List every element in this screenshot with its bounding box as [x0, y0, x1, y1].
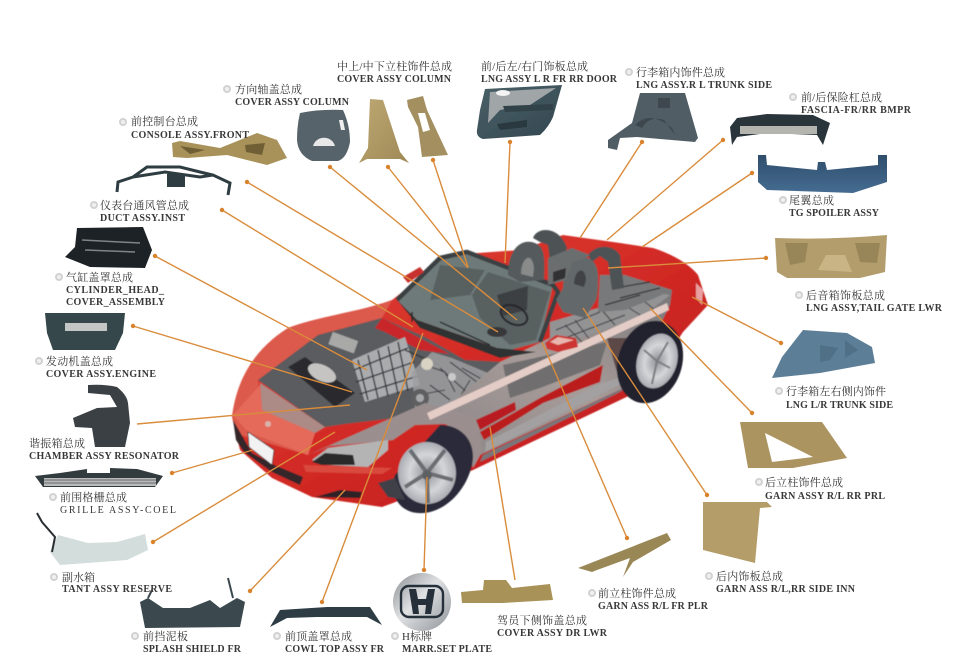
label: resonator [29, 436, 180, 462]
label: resonator: CHAMBER ASSY RESONATOR [29, 451, 180, 462]
car body [232, 235, 708, 507]
label: driver lower cover [497, 613, 608, 639]
black engine cover [288, 357, 355, 407]
label: splash shield: SPLASH SHIELD FR [143, 644, 242, 655]
label: driver lower cover: COVER ASSY DR LWR [497, 628, 608, 639]
engine bay [258, 318, 503, 427]
label: bumper fascia: FASCIA-FR/RR BMPR [801, 105, 912, 116]
label: instrument duct: DUCT ASSY.INST [100, 213, 185, 224]
label: steering column cover: COVER ASSY COLUMN [235, 97, 350, 108]
console dark [487, 327, 507, 337]
hood highlight band [232, 300, 392, 455]
sill [480, 385, 630, 462]
part: spoiler [758, 155, 887, 193]
car cutaway illustration [232, 230, 708, 513]
air vent [315, 490, 362, 498]
radiator window [260, 383, 325, 433]
label: console [120, 114, 249, 141]
wiper [412, 312, 490, 345]
part: grille [35, 468, 163, 487]
label: bumper fascia [790, 90, 912, 116]
label: cylinder head cover: 气缸盖罩总成 [66, 270, 133, 284]
label: tail gate trim: LNG ASSY,TAIL GATE LWR [806, 303, 943, 314]
label: instrument duct: 仪表台通风管总成 [100, 198, 189, 212]
part: rear inner panel [703, 502, 772, 563]
seat hoop openings [521, 258, 534, 277]
label: rear pillar trim [756, 475, 885, 502]
part: column trims [359, 96, 448, 163]
rear deck mechanism [598, 275, 672, 312]
label: trunk side trim [626, 65, 772, 91]
part: splash shield [140, 578, 245, 628]
part: rear pillar trim [740, 422, 847, 468]
label: H badge [392, 629, 492, 655]
label: driver lower cover: 驾员下侧饰盖总成 [497, 613, 587, 627]
part: console [172, 133, 287, 165]
label: console: 前控制台总成 [131, 114, 198, 128]
label: grille [50, 490, 176, 516]
label: engine cover [36, 354, 156, 380]
windshield [397, 252, 553, 350]
label: reserve tank: 副水箱 [62, 570, 95, 584]
part: tail gate trim [775, 235, 887, 278]
part: H badge [393, 573, 451, 631]
label: instrument duct [91, 198, 189, 224]
label: spoiler: 尾翼总成 [789, 193, 834, 207]
label: rear inner panel: GARN ASS R/L,RR SIDE INN [716, 584, 856, 595]
front wheel [378, 425, 473, 513]
label: front pillar trim: GARN ASS R/L FR PLR [598, 601, 709, 612]
upper mechanism [550, 292, 670, 348]
label: trunk side trim: LNG ASSY.R L TRUNK SIDE [636, 80, 772, 91]
label: grille: 前围格栅总成 [60, 490, 127, 504]
part: door panel [477, 85, 562, 139]
label: rear inner panel [706, 569, 856, 595]
label: reserve tank: TANT ASSY RESERVE [62, 584, 172, 595]
label: splash shield [132, 629, 242, 655]
label: spoiler [780, 193, 880, 219]
label: column trims: COVER ASSY COLUMN [337, 74, 452, 85]
steering wheel [498, 301, 530, 329]
label: cylinder head cover: CYLINDER_HEAD_ [66, 285, 165, 296]
label: H badge: MARR.SET PLATE [402, 644, 492, 655]
right engine parts [412, 352, 500, 412]
engine block [352, 337, 420, 402]
nose panel [233, 385, 315, 455]
dash shade [430, 265, 485, 300]
label: resonator: 谐振箱总成 [29, 436, 85, 450]
label: H badge: H标牌 [402, 629, 432, 643]
part: cylinder head cover [65, 227, 152, 268]
headlight [312, 440, 388, 467]
label: cylinder head cover: COVER_ASSEMBLY [66, 297, 166, 308]
label: tail gate trim [796, 288, 943, 314]
darker cockpit side [503, 342, 607, 398]
lower front grille [233, 420, 303, 485]
part: reserve tank [37, 513, 148, 565]
windscreen frame [397, 252, 558, 342]
part: bumper fascia [730, 114, 830, 145]
pale band [427, 303, 669, 420]
driver seat in cabin [497, 286, 528, 316]
label: trunk side panel: 行李箱左右侧内饰件 [786, 384, 886, 398]
seat hoops [533, 230, 567, 265]
part: trunk side trim [608, 93, 698, 150]
label: steering column cover: 方向轴盖总成 [235, 82, 302, 96]
label: grille: GRILLE ASSY-COEL [60, 505, 176, 516]
intake [305, 359, 339, 387]
label: door panel: 前/后左/右门饰板总成 [481, 59, 588, 73]
label: tail gate trim: 后音箱饰板总成 [806, 288, 885, 302]
cabin interior [472, 272, 550, 345]
label: rear pillar trim: 后立柱饰件总成 [765, 475, 843, 489]
label: column trims [337, 59, 452, 85]
label: rear pillar trim: GARN ASSY R/L RR PRL [765, 491, 885, 502]
firewall red zone [375, 318, 450, 354]
license plate [248, 432, 274, 465]
label: engine cover: COVER ASSY.ENGINE [46, 369, 156, 380]
red door front strip [476, 402, 516, 430]
label: front pillar trim [589, 586, 709, 612]
battery [328, 332, 358, 353]
label: trunk side trim: 行李箱内饰件总成 [636, 65, 725, 79]
red floor pan [480, 365, 603, 440]
part: front pillar trim [578, 533, 671, 577]
label: cowl top: 前顶盖罩总成 [285, 629, 352, 643]
part: trunk side panel [772, 330, 875, 378]
leader lines [111, 138, 783, 604]
lower bumper lip [303, 465, 392, 474]
label: rear inner panel: 后内饰板总成 [716, 569, 783, 583]
label: console: CONSOLE ASSY.FRONT [131, 130, 249, 141]
cowl bar [397, 300, 536, 358]
mirrors [545, 335, 578, 352]
label: trunk side panel: LNG L/R TRUNK SIDE [786, 400, 893, 411]
label: cylinder head cover [56, 270, 166, 308]
part: driver lower cover [461, 580, 553, 603]
label: splash shield: 前挡泥板 [143, 629, 188, 643]
label: bumper fascia: 前/后保险杠总成 [801, 90, 882, 104]
label: engine cover: 发动机盖总成 [46, 354, 113, 368]
label: steering column cover [224, 82, 350, 108]
seat backs behind [548, 248, 590, 285]
rear wheel [607, 312, 693, 412]
label: cowl top [274, 629, 385, 655]
part: cowl top [270, 607, 382, 627]
label: trunk side panel [776, 384, 893, 411]
label: spoiler: TG SPOILER ASSY [789, 208, 880, 219]
hood emblem [265, 421, 271, 427]
label: reserve tank [51, 570, 172, 595]
part: instrument duct [117, 167, 230, 195]
part: engine cover [45, 313, 125, 350]
front fender translucent [308, 403, 482, 468]
part: steering column cover [297, 110, 350, 161]
translucent door side [440, 290, 672, 455]
part: resonator [73, 385, 130, 447]
label: door panel [481, 59, 618, 85]
rear suspension [607, 338, 647, 382]
label: cowl top: COWL TOP ASSY FR [285, 644, 385, 655]
engine details [354, 342, 495, 400]
label: front pillar trim: 前立柱饰件总成 [598, 586, 676, 600]
tail light [696, 283, 703, 305]
label: column trims: 中上/中下立柱饰件总成 [337, 59, 452, 73]
label: door panel: LNG ASSY L R FR RR DOOR [481, 74, 618, 85]
